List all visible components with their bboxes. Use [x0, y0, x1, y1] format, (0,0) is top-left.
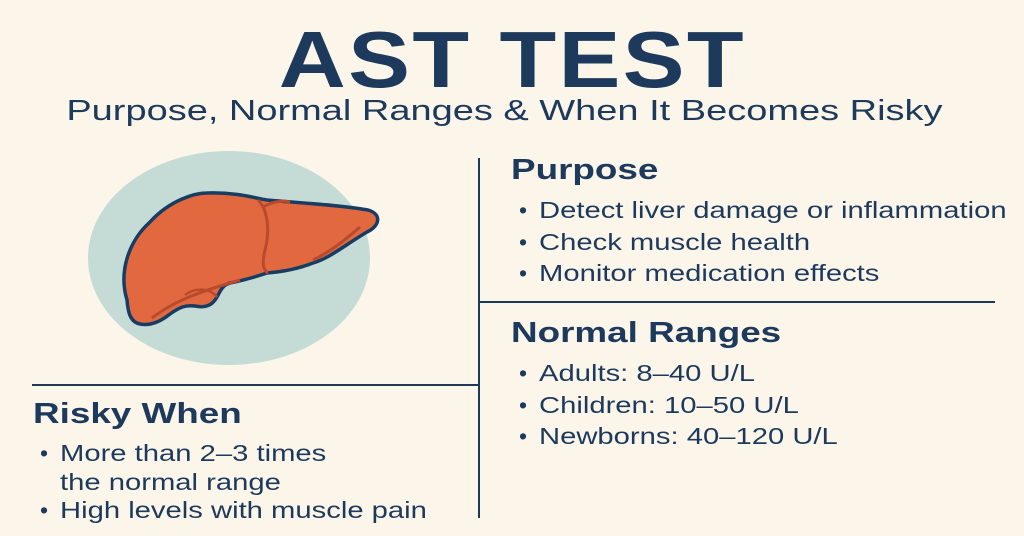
risky bullets — [40, 440, 427, 523]
risky bullets: • — [40, 440, 48, 466]
risky bullets: the normal range — [60, 468, 281, 494]
purpose bullets — [519, 197, 1007, 286]
subtitle: Purpose, Normal Ranges & When It Becomes Risky — [66, 95, 942, 127]
risky bullets: High levels with muscle pain — [60, 497, 427, 523]
range bullets — [519, 360, 838, 449]
panel: normal ranges — [511, 317, 838, 449]
purpose bullets: • — [519, 228, 527, 254]
range bullets: Newborns: 40–120 U/L — [539, 423, 838, 449]
heading: purpose: Purpose — [511, 154, 658, 186]
range bullets: • — [519, 423, 527, 449]
purpose bullets: Check muscle health — [539, 228, 810, 254]
purpose bullets: Monitor medication effects — [539, 260, 879, 286]
purpose bullets: Detect liver damage or inflammation — [539, 197, 1007, 223]
icon: liver — [88, 151, 380, 365]
heading: risky when: Risky When — [33, 398, 242, 430]
risky bullets: • — [40, 497, 48, 523]
title: AST TEST — [278, 15, 746, 104]
panel: purpose — [511, 154, 1007, 286]
range bullets: Children: 10–50 U/L — [539, 392, 799, 418]
panel: risky when — [33, 398, 427, 523]
purpose bullets: • — [519, 260, 527, 286]
range bullets: • — [519, 360, 527, 386]
range bullets: Adults: 8–40 U/L — [539, 360, 755, 386]
range bullets: • — [519, 392, 527, 418]
risky bullets: More than 2–3 times — [60, 440, 326, 466]
purpose bullets: • — [519, 197, 527, 223]
heading: normal ranges: Normal Ranges — [511, 317, 781, 349]
